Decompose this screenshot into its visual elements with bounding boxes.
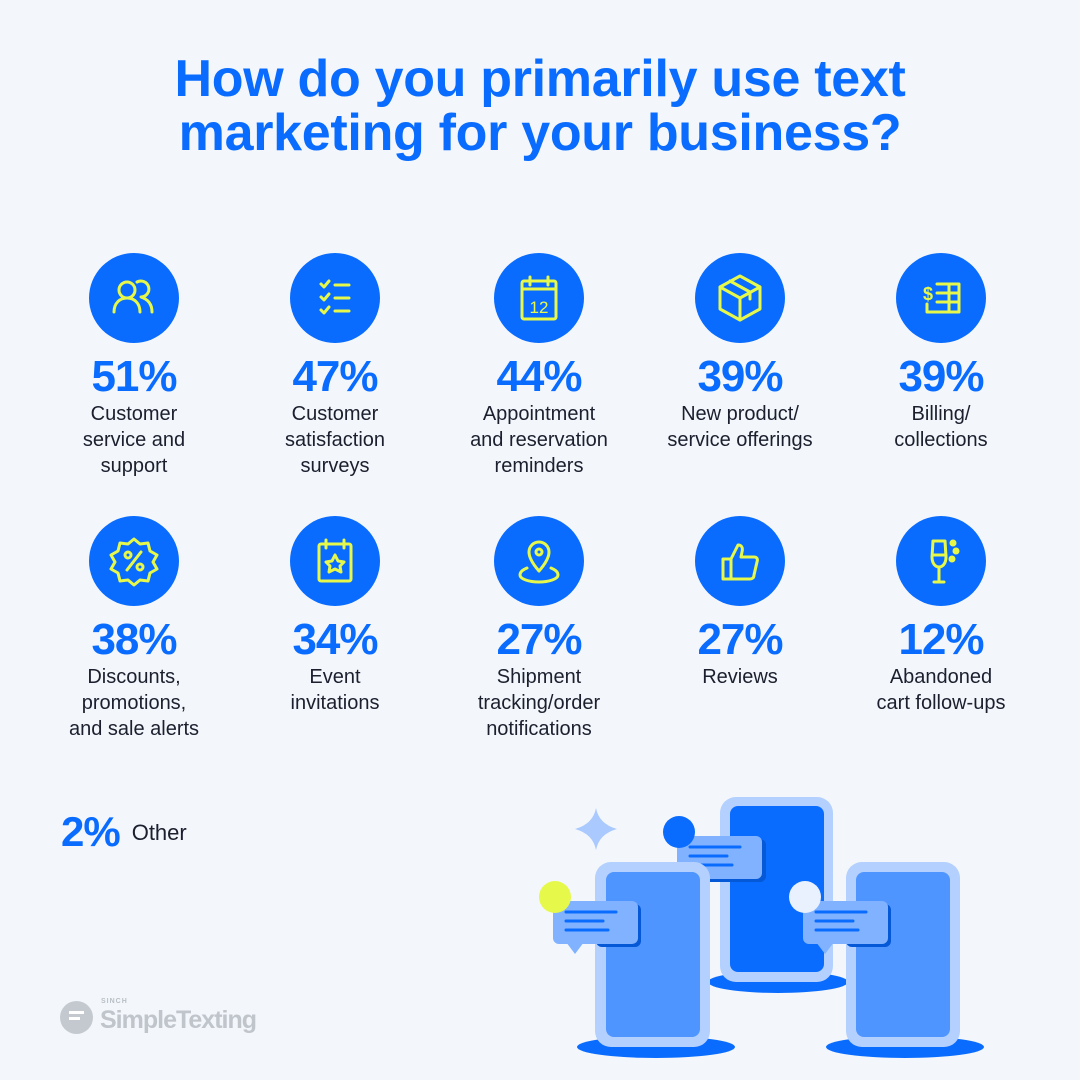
item: abandoned cart: 12% — [898, 615, 984, 664]
item: billing: collections — [894, 429, 988, 451]
item: customer service — [83, 253, 185, 477]
item: appointments: 44% — [496, 352, 582, 401]
item: discounts: promotions, — [82, 692, 186, 714]
item: shipment: 27% — [496, 615, 582, 664]
item: billing: 39% — [898, 352, 984, 401]
item: reviews: Reviews — [702, 666, 778, 688]
title — [174, 50, 906, 162]
item: discounts — [69, 516, 199, 740]
item: events — [290, 516, 380, 714]
item: customer service: service and — [83, 429, 185, 451]
logo: SINCH — [101, 998, 128, 1005]
item: shipment: notifications — [486, 718, 592, 740]
item: new product — [667, 253, 813, 451]
item: abandoned cart — [877, 516, 1005, 714]
item: new product: 39% — [697, 352, 783, 401]
item: shipment: Shipment — [497, 666, 581, 688]
item: discounts: 38% — [91, 615, 177, 664]
item: events: Event — [309, 666, 361, 688]
item: discounts: Discounts, — [87, 666, 181, 688]
other stat: 2% Other — [61, 808, 187, 855]
item: surveys: Customer — [292, 403, 378, 425]
logo: SimpleTexting — [100, 1006, 256, 1034]
item: reviews: 27% — [697, 615, 783, 664]
item: customer service: 51% — [91, 352, 177, 401]
item: appointments: and reservation — [470, 429, 608, 451]
item: events: 34% — [292, 615, 378, 664]
item: surveys — [285, 253, 385, 477]
item: shipment: tracking/order — [478, 692, 600, 714]
item: appointments — [470, 253, 608, 477]
logo — [60, 998, 256, 1034]
item: abandoned cart: cart follow-ups — [877, 692, 1005, 714]
item: new product: service offerings — [667, 429, 813, 451]
item: events: invitations — [291, 692, 379, 714]
item: appointments: reminders — [495, 455, 583, 477]
item: billing: $ — [923, 284, 933, 304]
item: appointments: Appointment — [483, 403, 595, 425]
title: How do you primarily use text — [174, 50, 906, 108]
item: new product: New product/ — [681, 403, 799, 425]
item: customer service: support — [101, 455, 167, 477]
item: shipment — [478, 516, 600, 740]
item: billing: Billing/ — [912, 403, 970, 425]
item: reviews — [695, 516, 785, 688]
item: surveys: surveys — [301, 455, 369, 477]
item: appointments: 12 — [530, 298, 548, 317]
item: customer service: Customer — [91, 403, 177, 425]
item: surveys: satisfaction — [285, 429, 385, 451]
item: billing — [894, 253, 988, 451]
item: discounts: and sale alerts — [69, 718, 199, 740]
title: marketing for your business? — [179, 104, 901, 162]
item: abandoned cart: Abandoned — [890, 666, 992, 688]
item: surveys: 47% — [292, 352, 378, 401]
